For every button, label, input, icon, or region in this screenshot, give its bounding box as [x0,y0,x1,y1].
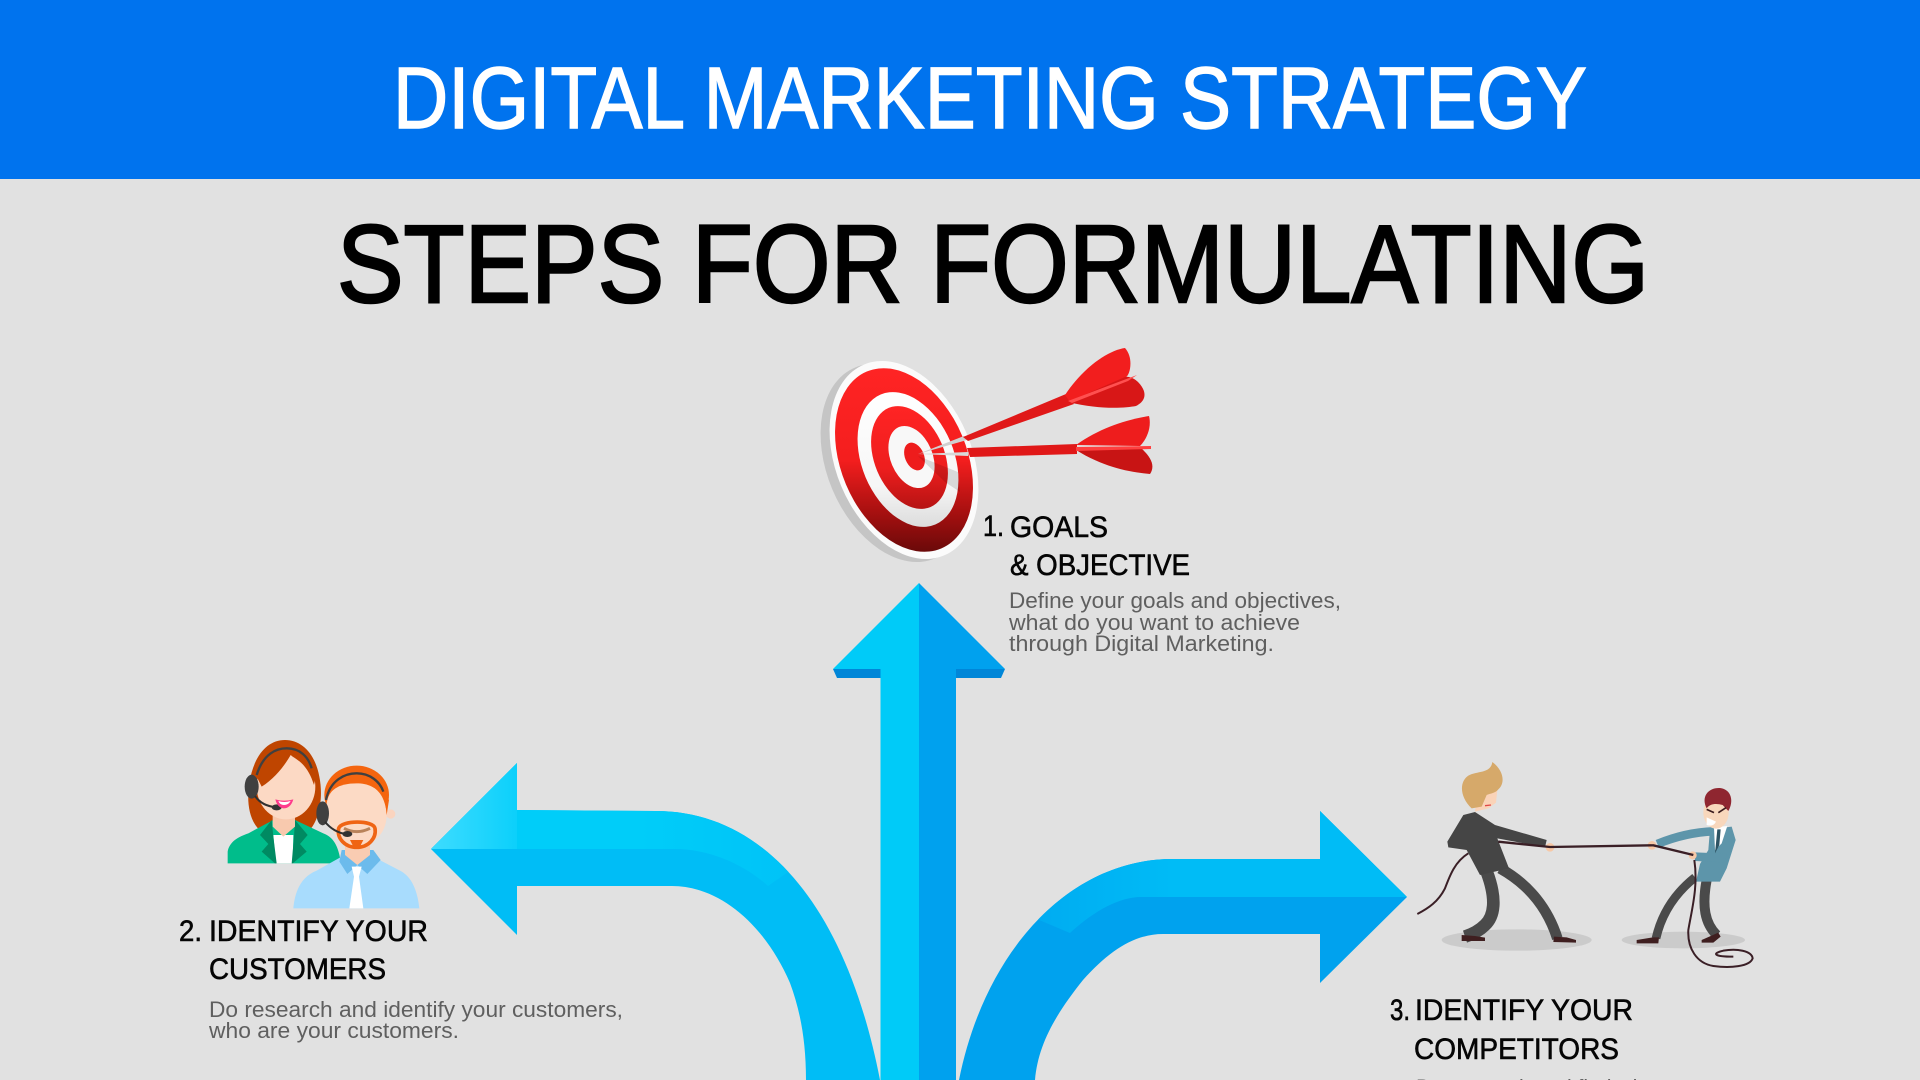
step 3 heading: IDENTIFY YOUR [1415,994,1633,1027]
step 1 text block [983,510,1341,656]
target board [792,338,1007,585]
icon: tug of war competitors [1417,762,1753,967]
title: DIGITAL MARKETING STRATEGY [393,50,1587,147]
dart: upper [918,348,1144,454]
step 2 heading: IDENTIFY YOUR [209,915,428,948]
step 1 description: through Digital Marketing. [1009,631,1274,656]
step 2 description [208,997,623,1043]
header banner [0,0,1920,179]
step 3 text block [1390,994,1656,1080]
step 2 heading: CUSTOMERS [209,953,386,986]
right man [1637,788,1736,943]
woman agent [228,740,341,863]
step 1 heading [1010,511,1190,582]
rope [1417,842,1753,967]
step 1 number: 1. [983,510,1004,543]
arrow: up [833,583,1005,1080]
step 3 heading: COMPETITORS [1414,1033,1619,1066]
icon: target with darts [792,338,1152,585]
step 1 heading: GOALS [1010,511,1108,544]
arrow: left [431,750,880,1080]
step 1 heading: & OBJECTIVE [1010,549,1190,582]
arrow: right [959,800,1407,1080]
step 2 description: Do research and identify your customers, [209,997,623,1022]
man agent [293,766,419,908]
step 2 number: 2. [179,915,202,948]
ground shadows [1442,929,1745,951]
arrows: three direction arrows [431,583,1407,1080]
step 1 description: what do you want to achieve [1008,610,1300,635]
step 2 description: who are your customers. [208,1018,459,1043]
step 2 text block [179,915,623,1043]
step 3 number: 3. [1390,994,1410,1027]
step 3 heading [1414,994,1633,1066]
step 2 heading [209,915,428,986]
step 1 description: Define your goals and objectives, [1009,588,1341,613]
left man [1447,762,1576,943]
icon: customer service agents [228,740,419,908]
step 1 description [1008,588,1341,656]
dart: lower [918,416,1152,474]
subtitle heading: STEPS FOR FORMULATING [337,203,1649,326]
